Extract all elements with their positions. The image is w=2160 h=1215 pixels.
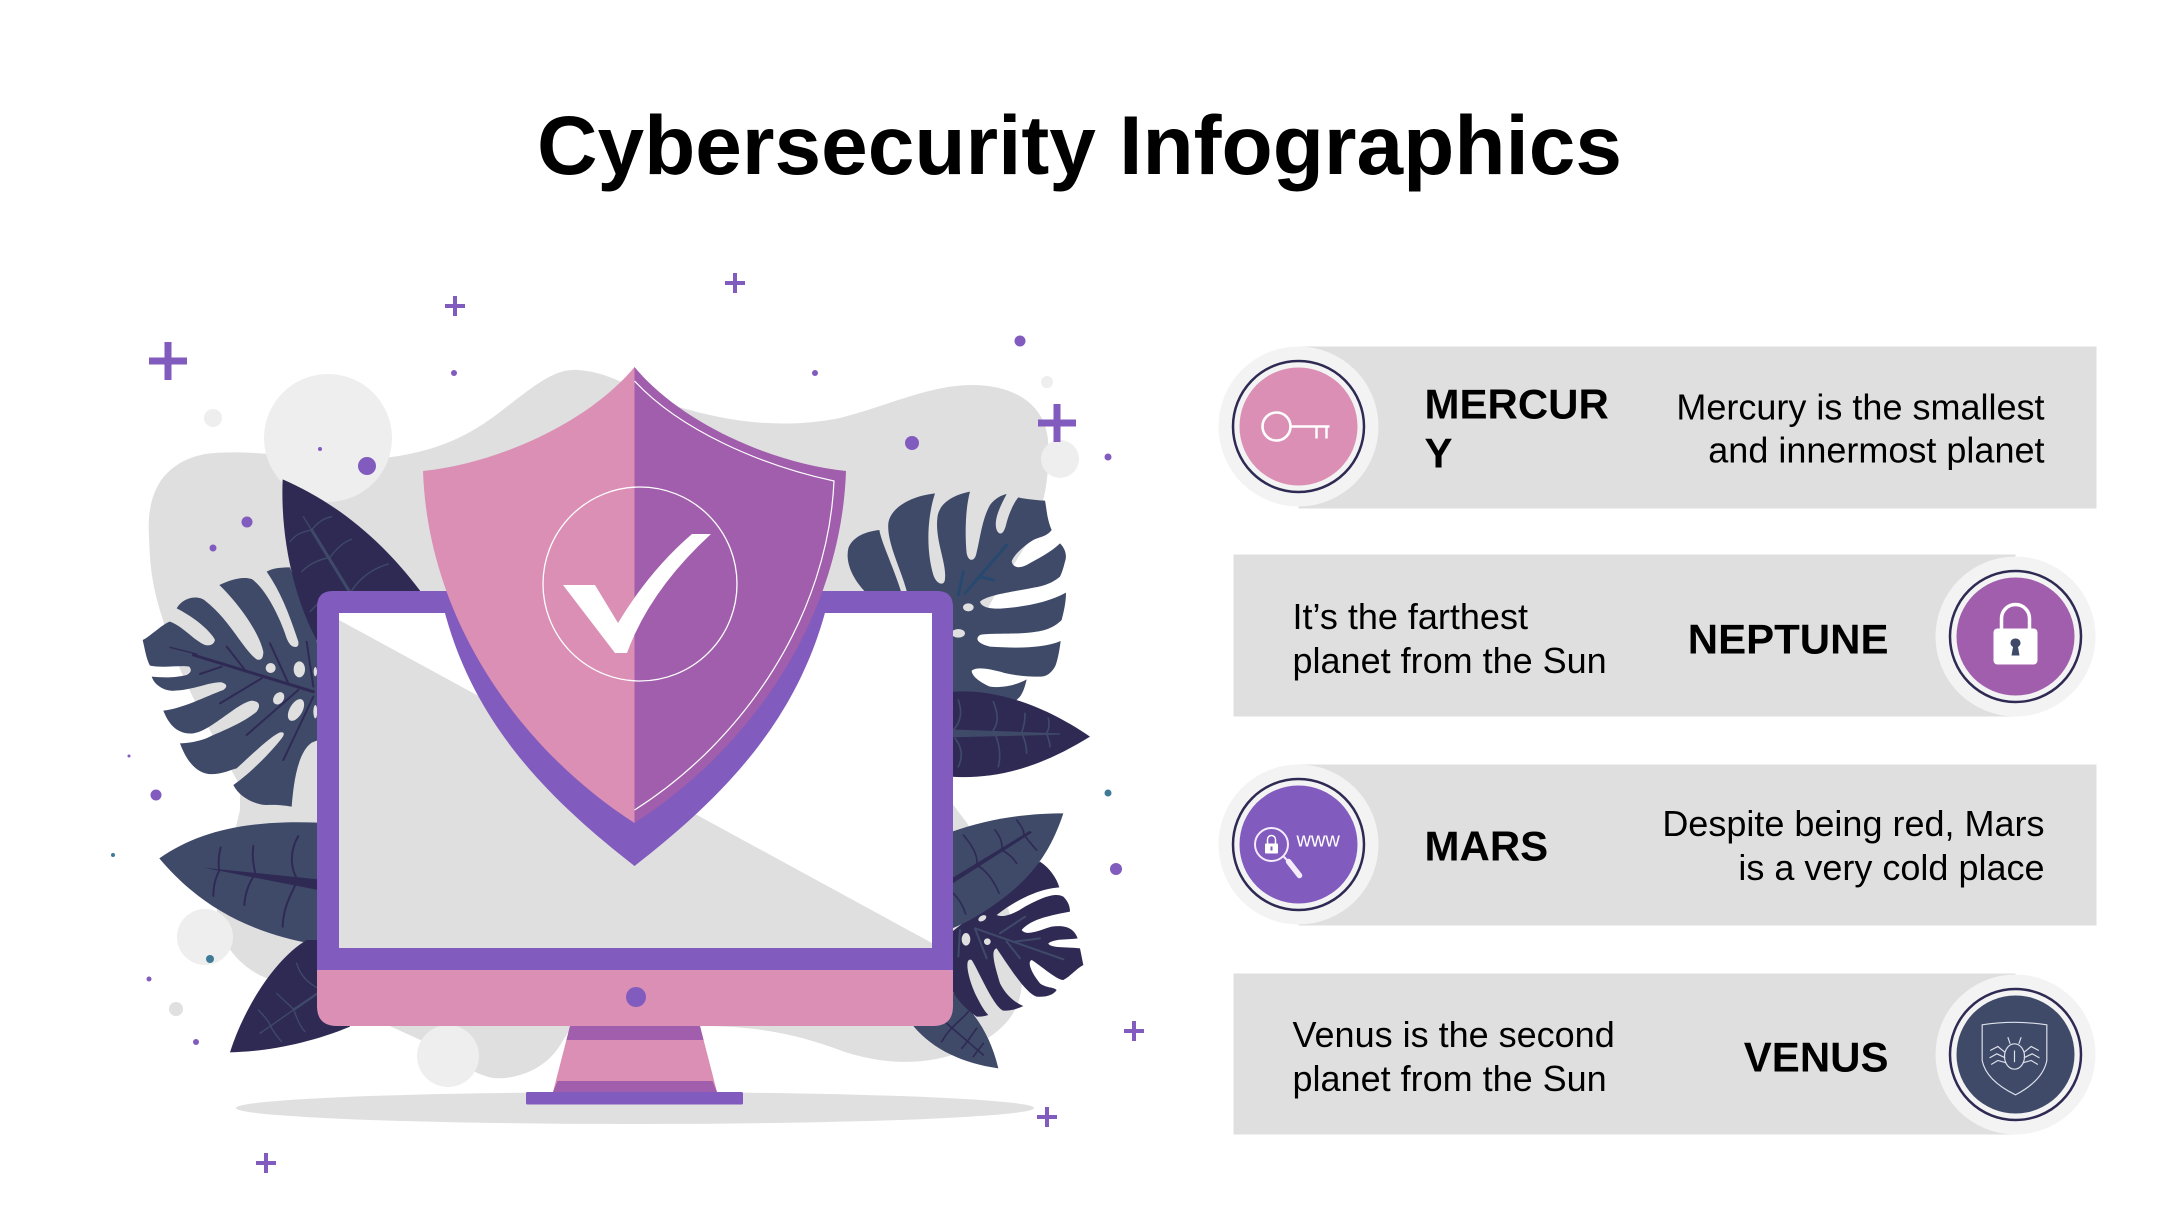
icon: web security magnifier (1218, 764, 1378, 924)
small plus signs (256, 273, 1144, 1173)
description: and innermost planet (1708, 430, 2044, 470)
monitor base panel (317, 970, 953, 1026)
heading: MARS (1424, 822, 1548, 870)
description: It’s the farthest (1292, 596, 1528, 637)
shield (423, 367, 846, 866)
power button (626, 987, 646, 1007)
leaf: left blue (159, 822, 318, 945)
shield left half (423, 367, 634, 823)
bar (1234, 554, 2016, 716)
screen (339, 613, 932, 948)
shield inner line (634, 381, 834, 810)
leaf: lower left dark (230, 940, 350, 1052)
bar (1298, 764, 2096, 926)
icon: key (1218, 346, 1378, 506)
shield right half (634, 367, 846, 823)
light circles (169, 374, 1079, 1087)
panel: Mars (1218, 764, 2096, 926)
description: Venus is the second (1292, 1014, 1615, 1055)
background blob (149, 370, 1048, 1078)
leaf: lower right small (913, 990, 998, 1068)
leaf: dark top-left (282, 479, 430, 670)
leaf: lower right monstera (950, 862, 1083, 1017)
description: Despite being red, Mars (1662, 803, 2044, 844)
description: planet from the Sun (1292, 640, 1607, 681)
bar (1298, 346, 2096, 508)
heading: Y (1424, 430, 1453, 476)
leaf: right monstera (848, 492, 1066, 707)
leaf: dark right (950, 691, 1090, 777)
heading: MERCUR (1424, 380, 1609, 428)
shield circle (543, 487, 737, 681)
illustration: computer protected by shield (111, 273, 1144, 1173)
icon: shield with bug (1936, 974, 2096, 1134)
description: is a very cold place (1738, 847, 2044, 888)
panel: Neptune (1234, 554, 2096, 716)
heading: NEPTUNE (1688, 616, 1888, 662)
icon: padlock (1936, 556, 2096, 716)
leaf: left monstera (143, 567, 318, 807)
shadow (236, 1092, 1034, 1124)
plus signs (149, 342, 1076, 442)
check mark (563, 534, 711, 653)
monitor (317, 591, 953, 1104)
monitor stand (526, 1026, 743, 1104)
decorative dots (111, 336, 1122, 1045)
icon: web security magnifier: www (1296, 830, 1340, 852)
panel: Venus (1234, 974, 2096, 1134)
title: Cybersecurity Infographics (537, 98, 1622, 192)
description: Mercury is the smallest (1676, 386, 2044, 428)
bar (1234, 974, 2016, 1134)
monitor body (317, 591, 953, 972)
description: planet from the Sun (1292, 1058, 1607, 1099)
heading: VENUS (1744, 1034, 1888, 1080)
panel: Mercury (1218, 346, 2096, 508)
shield purple backing (441, 597, 829, 866)
leaf: upper right blue (950, 813, 1063, 929)
